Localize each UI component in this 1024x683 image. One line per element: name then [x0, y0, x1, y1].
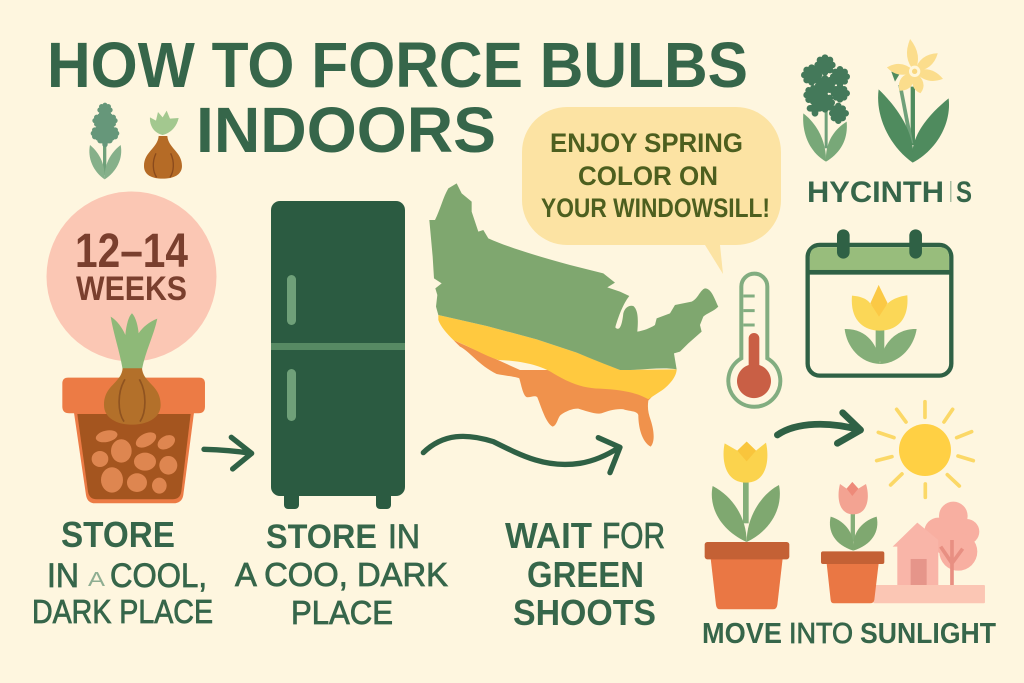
- icon: large potted tulip: [705, 442, 789, 609]
- icon: small bulb: [144, 111, 182, 179]
- callout: speech bubble: COLOR ON: [578, 161, 718, 191]
- title: HOW TO FORCE BULBS: [47, 29, 748, 101]
- icon: sun: [877, 402, 973, 497]
- label: move into sunlight: SUNLIGHT: [860, 618, 996, 650]
- label: step two: A COO, DARK: [235, 556, 448, 593]
- icon: thermometer: [728, 274, 780, 407]
- icon: refrigerator: [271, 201, 405, 509]
- label: step one: [32, 514, 213, 630]
- callout: weeks badge: WEEKS: [76, 270, 187, 308]
- icon: potted bulb with pebbles: [62, 313, 205, 503]
- label: step three: SHOOTS: [513, 592, 656, 633]
- icon: small hyacinth: [89, 105, 121, 179]
- label: step one: IN: [47, 557, 79, 595]
- label: step two: STORE: [266, 518, 377, 556]
- label: step three: GREEN: [527, 554, 644, 595]
- icon: large hyacinth: [803, 58, 847, 162]
- label: step one: A: [88, 569, 106, 591]
- label: hyacinths: S: [956, 176, 972, 209]
- title: INDOORS: [196, 94, 496, 166]
- map: US climate zones: [429, 183, 718, 447]
- label: step one: STORE: [61, 514, 175, 555]
- label: move into sunlight: INTO: [789, 618, 853, 650]
- label: step three: FOR: [602, 515, 665, 556]
- label: step two: [235, 518, 448, 631]
- callout: weeks badge: 12–14: [75, 225, 188, 278]
- label: step three: WAIT: [505, 515, 592, 556]
- callout: speech bubble: YOUR WINDOWSILL!: [541, 193, 770, 223]
- icon: house and tree scene: [873, 502, 985, 603]
- callout: speech bubble: [522, 107, 781, 274]
- label: step one: COOL,: [110, 557, 207, 595]
- arrow: to sun: [777, 413, 861, 443]
- label: hyacinths: HYCINTH: [807, 176, 944, 209]
- label: step one: DARK PLACE: [32, 593, 213, 630]
- icon: daffodil: [878, 38, 949, 163]
- title: [47, 29, 748, 166]
- label: move into sunlight: MOVE: [702, 618, 782, 650]
- icon: small potted tulip: [821, 482, 884, 603]
- icon: calendar with tulip: [808, 229, 951, 376]
- label: step two: PLACE: [291, 594, 393, 631]
- arrow: wavy to map: [423, 436, 620, 473]
- label: step three: [505, 515, 665, 633]
- callout: speech bubble: ENJOY SPRING: [550, 128, 743, 158]
- arrow: pot to fridge: [204, 437, 252, 469]
- callout: weeks badge: [46, 192, 216, 362]
- label: step two: IN: [388, 518, 420, 556]
- label: move into sunlight: [702, 618, 996, 650]
